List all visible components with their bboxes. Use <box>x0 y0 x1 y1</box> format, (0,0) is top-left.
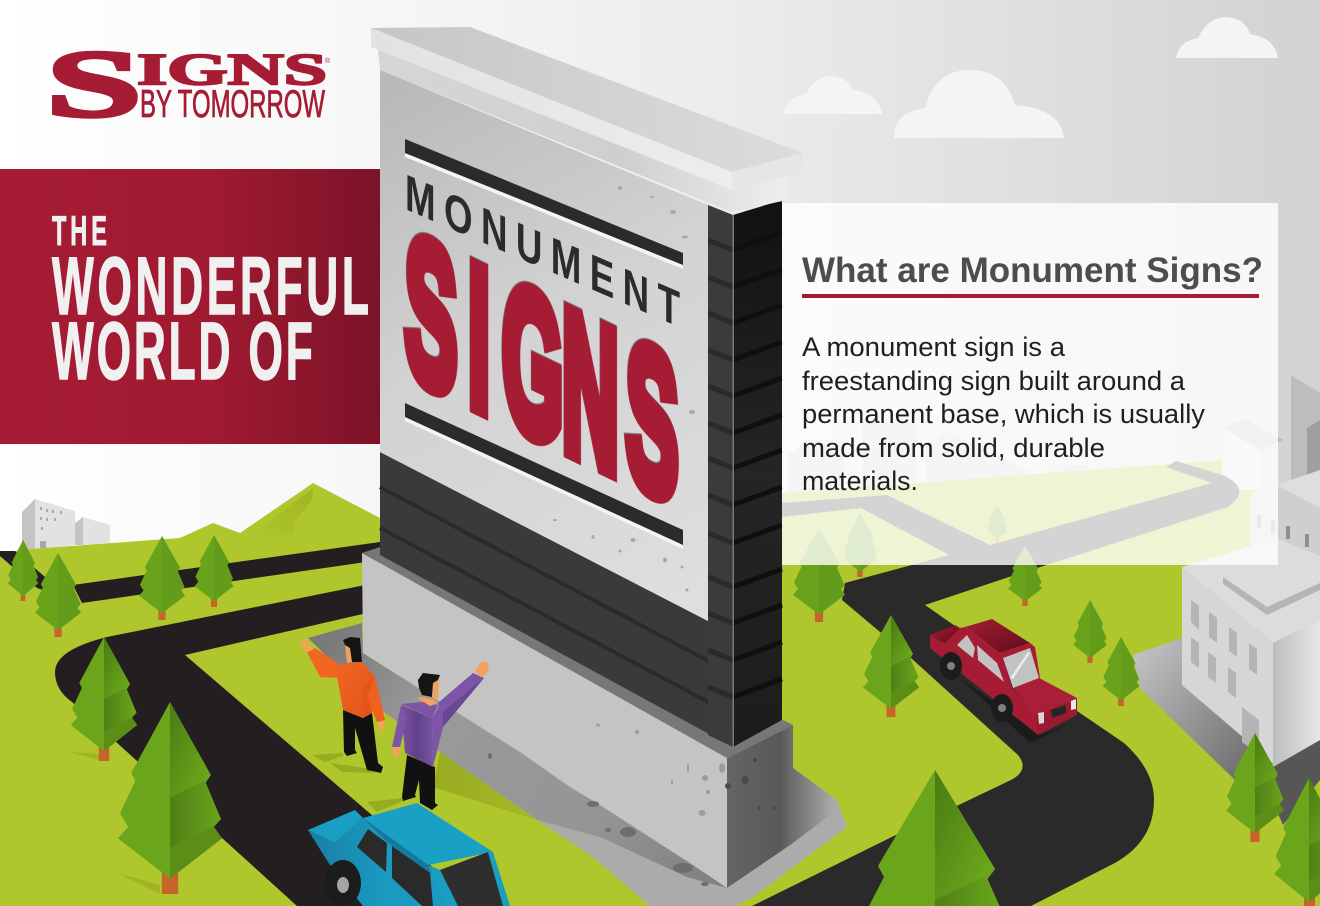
upper bar <box>405 139 683 269</box>
large front-left tree <box>118 702 222 894</box>
logo <box>46 30 331 137</box>
red car <box>930 619 1077 743</box>
title band <box>0 169 380 444</box>
big building <box>1182 538 1320 767</box>
tree behind panel 3 <box>987 505 1007 542</box>
logo: BY TOMORROW <box>140 83 325 126</box>
large front tree <box>869 770 1000 906</box>
person in purple <box>367 661 489 812</box>
purple man head <box>417 673 440 706</box>
road: left side <box>0 542 478 906</box>
panel body text: permanent base, which is usually <box>802 399 1206 429</box>
car lights and grille <box>1038 699 1076 724</box>
car windows <box>1003 648 1039 688</box>
orange man legs <box>343 710 383 773</box>
person in orange <box>300 637 385 773</box>
orange man torso <box>335 662 375 718</box>
car wheels <box>940 652 1013 722</box>
distant buildings on the left <box>22 499 110 549</box>
orange man arm left <box>307 648 338 678</box>
mid-left tree <box>71 637 137 761</box>
back row tree 1 <box>8 540 38 601</box>
face speckles <box>553 186 695 592</box>
tree at right edge <box>1274 778 1320 906</box>
sign face <box>380 70 708 621</box>
tree behind panel 2 <box>843 513 877 577</box>
blue car windows <box>357 829 387 872</box>
clouds <box>784 17 1278 138</box>
tree shadow <box>118 873 160 894</box>
orange man head <box>343 637 362 663</box>
back row tree 3 <box>139 536 185 620</box>
cap underside <box>378 50 787 212</box>
tree beside red car <box>863 615 919 717</box>
cap end <box>732 153 803 190</box>
purple man torso <box>401 702 438 718</box>
purple man legs <box>402 755 438 810</box>
tree near building <box>1226 733 1284 842</box>
logo: S <box>46 30 142 137</box>
green ground <box>0 452 1320 906</box>
panel body text: A monument sign is a <box>802 332 1065 362</box>
title text <box>52 208 369 396</box>
sign text: monument: MONUMENT <box>405 163 680 339</box>
road: right side <box>752 461 1239 906</box>
tree shadow <box>68 752 104 761</box>
logo: ® <box>325 57 331 65</box>
blue car wheel <box>325 860 361 906</box>
car body <box>930 627 1040 735</box>
back row tree 2 <box>35 553 81 637</box>
title text: WONDERFUL <box>52 239 369 331</box>
dark cladding <box>380 200 782 747</box>
concrete base <box>362 547 793 888</box>
tree right of road 2 <box>1103 637 1139 706</box>
heading rule <box>802 294 1259 298</box>
blue car <box>308 803 510 906</box>
panel body text <box>802 332 1206 496</box>
big building dark shadow <box>1248 740 1320 825</box>
big building shadow <box>1133 638 1250 780</box>
sign text: signs: SIGNS <box>405 190 678 546</box>
car shadow <box>960 678 1067 743</box>
mountain shading <box>250 488 313 537</box>
blue car body <box>308 818 460 906</box>
tree behind panel 4 <box>1008 546 1042 606</box>
logo: IGNS <box>137 45 327 94</box>
tree right of road 1 <box>1073 600 1107 663</box>
panel body text: materials. <box>802 466 918 496</box>
tree behind panel 1 <box>793 528 845 622</box>
panel heading: What are Monument Signs? <box>802 251 1263 290</box>
distant buildings on the right <box>1222 375 1320 570</box>
cap front <box>371 28 732 190</box>
panel body text: made from solid, durable <box>802 433 1105 463</box>
title text: WORLD OF <box>52 304 313 396</box>
ground shadow of the monument base <box>308 623 847 906</box>
title text: THE <box>52 208 107 255</box>
info panel <box>782 203 1278 565</box>
purple man raised arm <box>438 673 484 727</box>
lower bar <box>405 403 683 549</box>
faded distant buildings behind panel <box>788 423 1088 493</box>
back row tree 4 <box>195 535 233 607</box>
purple man shadow <box>367 798 403 812</box>
panel body text: freestanding sign built around a <box>802 366 1185 396</box>
monument sign <box>362 27 803 888</box>
orange man shadow <box>312 753 375 773</box>
cap top <box>371 27 803 172</box>
